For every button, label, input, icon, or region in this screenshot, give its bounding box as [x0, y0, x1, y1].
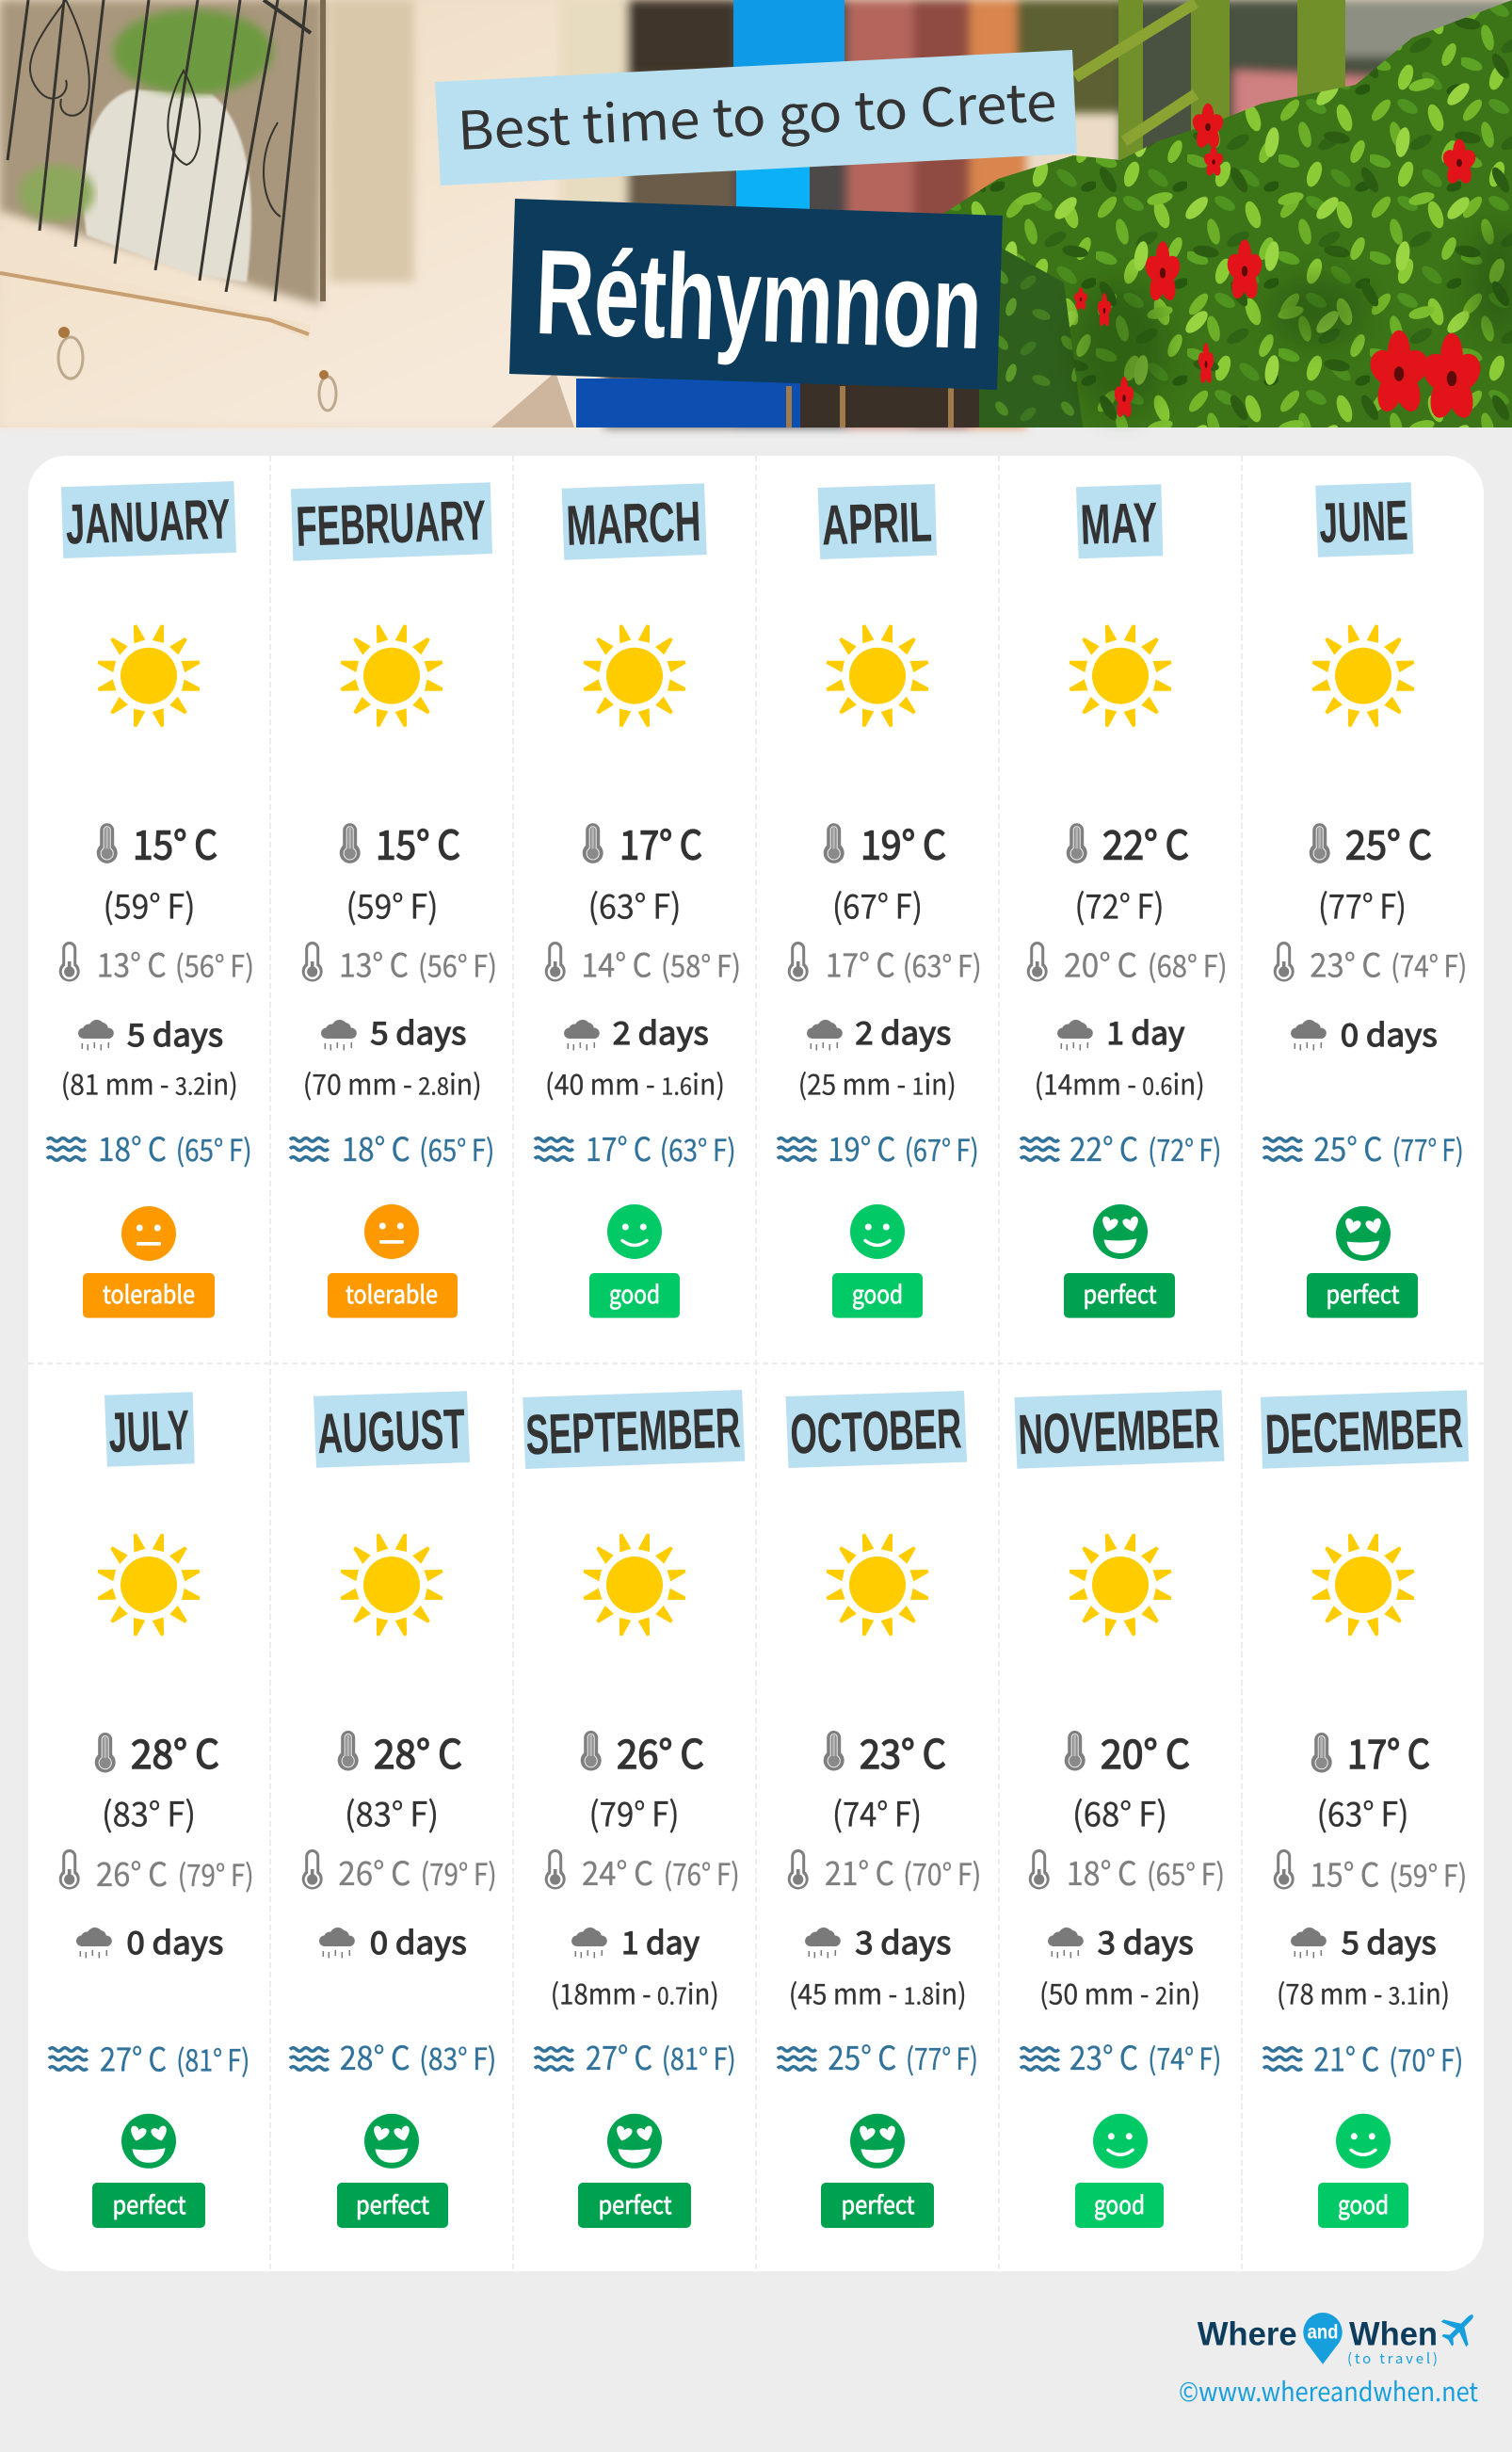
green door frames: [1118, 0, 1345, 198]
icon: sun: [826, 1533, 929, 1637]
rainy days: 5 days: [370, 1008, 466, 1054]
sea temperature: 28° C: [340, 2032, 410, 2080]
high temperature Fahrenheit: (83° F): [345, 1787, 439, 1836]
low temperature: [1027, 940, 1228, 987]
rainfall: (50 mm - 2in): [1039, 1972, 1200, 2013]
panel: November: [1014, 1390, 1225, 2228]
rating badge: good: good: [609, 1276, 660, 1311]
rating badge: tolerable: tolerable: [346, 1276, 438, 1311]
high temperature Fahrenheit: (67° F): [832, 879, 923, 928]
panel: September: [523, 1390, 745, 2228]
high temperature: [824, 1723, 946, 1781]
month title: September: SEPTEMBER: [524, 1396, 741, 1466]
rating badge: perfect: [1064, 1273, 1175, 1318]
low temperature: [1029, 1847, 1225, 1895]
icon: happy face: [1093, 2114, 1148, 2169]
low temperature: 18° C: [1067, 1847, 1137, 1895]
icon: sun: [1311, 1533, 1415, 1637]
high temperature: [824, 814, 946, 872]
low temperature: 17° C: [826, 940, 895, 987]
rainy days: 2 days: [855, 1008, 951, 1054]
low temperature: (56° F): [175, 944, 254, 987]
icon: love face: [1093, 1204, 1148, 1259]
low temperature: (56° F): [418, 944, 497, 987]
low temperature: (76° F): [664, 1851, 740, 1895]
month title: August: [314, 1391, 470, 1468]
rating badge: perfect: perfect: [1326, 1276, 1400, 1311]
low temperature: [545, 940, 741, 987]
rainfall: (40 mm - 1.6in): [545, 1062, 725, 1104]
sea temperature: 19° C: [828, 1123, 895, 1171]
rainy days: [319, 1918, 467, 1963]
green bush: [979, 188, 1111, 427]
low temperature: [1274, 1849, 1467, 1897]
high temperature Fahrenheit: (74° F): [832, 1787, 922, 1836]
panel: March: [535, 483, 741, 1318]
low temperature: [1274, 940, 1467, 987]
month title: July: [105, 1392, 195, 1467]
high temperature: 19° C: [861, 814, 946, 872]
month title: November: NOVEMBER: [1017, 1396, 1220, 1466]
month title: February: [291, 482, 492, 561]
rainy days: [805, 1918, 951, 1963]
icon: love face: [121, 2114, 176, 2169]
sea temperature: [778, 1123, 979, 1171]
high temperature: [1311, 1723, 1430, 1781]
low temperature: 21° C: [825, 1847, 894, 1895]
logo: Where and When: [1198, 2302, 1486, 2368]
high temperature: 23° C: [860, 1723, 946, 1781]
high temperature Fahrenheit: (79° F): [589, 1787, 680, 1836]
low temperature: (68° F): [1148, 944, 1228, 987]
rating badge: perfect: perfect: [356, 2186, 429, 2221]
sea temperature: (77° F): [1392, 1127, 1464, 1170]
rating badge: good: [1075, 2183, 1164, 2228]
rating badge: perfect: perfect: [113, 2186, 186, 2221]
rating badge: perfect: [821, 2183, 934, 2228]
low temperature: [545, 1847, 740, 1895]
high temperature: [583, 814, 702, 872]
sea temperature: 27° C: [586, 2032, 652, 2080]
sea temperature: [1021, 2032, 1221, 2080]
panel: December: [1261, 1390, 1469, 2228]
rainy days: 5 days: [127, 1010, 223, 1056]
window ledge: [0, 231, 311, 341]
icon: happy face: [1336, 2114, 1391, 2169]
month title: January: JANUARY: [65, 487, 232, 557]
rainfall: (18mm - 0.7in): [551, 1972, 719, 2013]
banner: Best time to go to Crete: Best time to go to Crete: [456, 60, 1058, 166]
month title: March: MARCH: [565, 490, 702, 557]
sea temperature: (70° F): [1389, 2037, 1463, 2080]
icon: sun: [97, 1533, 201, 1637]
rainy days: 3 days: [855, 1918, 951, 1963]
high temperature: 25° C: [1345, 814, 1432, 872]
sea temperature: (77° F): [906, 2036, 978, 2079]
high temperature: 26° C: [617, 1723, 704, 1781]
sea temperature: (67° F): [905, 1127, 979, 1170]
low temperature: (79° F): [178, 1852, 254, 1895]
low temperature: 13° C: [97, 940, 167, 987]
sea temperature: (65° F): [419, 1127, 494, 1170]
month title: October: [785, 1391, 967, 1468]
month title: February: FEBRUARY: [295, 489, 487, 558]
rainy days: [1057, 1008, 1184, 1054]
rainy days: 1 day: [621, 1918, 700, 1963]
low temperature: 14° C: [581, 940, 651, 987]
rainy days: [571, 1918, 700, 1963]
rating badge: good: good: [1094, 2186, 1145, 2221]
low temperature: 23° C: [1310, 940, 1381, 987]
rainy days: 0 days: [370, 1918, 467, 1963]
logo: Where and When: When: [1349, 2316, 1438, 2353]
sea temperature: [778, 2032, 978, 2080]
panel: August: [290, 1391, 497, 2228]
rainy days: 5 days: [1342, 1918, 1437, 1963]
rating badge: perfect: perfect: [1083, 1276, 1157, 1311]
banner: Réthymnon: Réthymnon: [534, 225, 984, 375]
blue bench and railings: [576, 379, 802, 427]
sea temperature: 27° C: [100, 2033, 167, 2081]
month title: May: [1076, 484, 1163, 558]
wall rings: [58, 337, 336, 411]
icon: sun: [1311, 624, 1415, 728]
low temperature: (65° F): [1147, 1851, 1225, 1895]
white card panel: [28, 456, 1484, 2271]
rainy days: 0 days: [126, 1918, 223, 1963]
sea temperature: 22° C: [1070, 1123, 1138, 1171]
low temperature: 26° C: [96, 1848, 168, 1896]
high temperature Fahrenheit: (59° F): [346, 879, 439, 928]
icon: love face: [1336, 1206, 1391, 1261]
rainfall: (81 mm - 3.2in): [61, 1062, 238, 1104]
high temperature: 15° C: [376, 814, 460, 872]
panel: April: [778, 484, 982, 1318]
month title: November: [1014, 1390, 1224, 1469]
icon: neutral face: [364, 1204, 419, 1259]
icon: airplane: [1435, 2302, 1486, 2353]
website credit: ©www.whereandwhen.net: [1179, 2372, 1478, 2410]
rating badge: tolerable: [83, 1273, 215, 1318]
rating badge: tolerable: [328, 1273, 458, 1318]
header photo: street in Réthymnon: [0, 0, 1512, 427]
month title: March: [562, 483, 707, 560]
sky strips: [733, 0, 844, 68]
high temperature: [95, 1723, 219, 1781]
sea temperature: (81° F): [176, 2037, 249, 2080]
low temperature: [788, 940, 982, 987]
sea temperature: [290, 2032, 496, 2080]
sea temperature: 21° C: [1313, 2033, 1379, 2081]
high temperature Fahrenheit: (83° F): [102, 1787, 196, 1836]
rainy days: [564, 1008, 709, 1054]
red flowers: [1073, 104, 1484, 426]
low temperature: [302, 940, 497, 987]
sea temperature: 23° C: [1070, 2032, 1138, 2080]
month title: June: JUNE: [1318, 489, 1408, 555]
high temperature: [340, 814, 460, 872]
rainy days: 3 days: [1098, 1918, 1194, 1963]
month title: October: OCTOBER: [789, 1396, 962, 1466]
high temperature: 28° C: [374, 1723, 462, 1781]
high temperature Fahrenheit: (63° F): [1316, 1787, 1408, 1836]
rainfall: (45 mm - 1.8in): [789, 1972, 967, 2013]
sea temperature: [1263, 2033, 1463, 2081]
panel: February: [290, 482, 497, 1318]
rainy days: [76, 1918, 223, 1963]
high temperature: 17° C: [619, 814, 702, 872]
rating badge: good: [1318, 2183, 1408, 2228]
rainy days: [78, 1010, 223, 1056]
rainy days: 2 days: [613, 1008, 709, 1054]
low temperature: (58° F): [661, 944, 741, 987]
banner: Réthymnon: [509, 199, 1003, 390]
sea temperature: [535, 2032, 736, 2080]
rating badge: perfect: perfect: [599, 2186, 672, 2221]
high temperature: [97, 814, 217, 872]
panel: October: [778, 1391, 981, 2228]
month title: April: [818, 484, 937, 559]
banner: Best time to go to Crete: [435, 50, 1077, 186]
rainy days: [1048, 1918, 1194, 1963]
rating badge: perfect: perfect: [842, 2186, 915, 2221]
icon: sun: [826, 624, 929, 728]
low temperature: (79° F): [421, 1851, 497, 1895]
rating badge: good: good: [852, 1276, 903, 1311]
rainy days: [807, 1008, 951, 1054]
rainy days: 0 days: [1341, 1010, 1438, 1056]
rainfall: (14mm - 0.6in): [1035, 1062, 1205, 1104]
sea temperature: 17° C: [586, 1123, 651, 1171]
icon: sun: [340, 1533, 443, 1637]
logo: Where and When: and: [1307, 2322, 1339, 2343]
icon: sun: [1069, 1533, 1172, 1637]
rating badge: tolerable: tolerable: [103, 1276, 195, 1311]
high temperature Fahrenheit: (59° F): [104, 879, 196, 928]
rainfall: (78 mm - 3.1in): [1277, 1972, 1450, 2013]
sea temperature: [49, 2033, 249, 2081]
rainy days: [1291, 1918, 1437, 1963]
month title: August: AUGUST: [316, 1397, 466, 1465]
icon: sun: [583, 624, 686, 728]
sea temperature: 25° C: [1313, 1123, 1382, 1171]
sea temperature: (74° F): [1148, 2036, 1221, 2079]
low temperature: [59, 1848, 254, 1896]
high temperature: 17° C: [1347, 1723, 1430, 1781]
sea temperature: 18° C: [98, 1123, 167, 1171]
icon: sun: [1069, 624, 1172, 728]
panel: July: [49, 1392, 254, 2228]
low temperature: 26° C: [338, 1847, 410, 1895]
sea temperature: [1021, 1123, 1221, 1171]
panel: January: [47, 481, 254, 1318]
sea temperature: (63° F): [660, 1127, 736, 1170]
month title: June: [1315, 482, 1413, 557]
low temperature: [59, 940, 254, 987]
rainfall: (70 mm - 2.8in): [303, 1062, 482, 1104]
icon: map pin: [1303, 2313, 1343, 2364]
low temperature: (74° F): [1391, 944, 1467, 987]
sea temperature: [1263, 1123, 1464, 1171]
rainy days: [321, 1008, 466, 1054]
high temperature: [338, 1723, 462, 1781]
month title: May: MAY: [1079, 491, 1159, 557]
icon: neutral face: [121, 1206, 176, 1261]
iron window bars: [8, 0, 311, 301]
doorway shadow: [491, 372, 574, 427]
month title: April: APRIL: [821, 490, 933, 557]
icon: love face: [850, 2114, 905, 2169]
high temperature: [1310, 814, 1432, 872]
sea temperature: [290, 1123, 494, 1171]
high temperature: 22° C: [1102, 814, 1189, 872]
high temperature Fahrenheit: (72° F): [1075, 879, 1164, 928]
icon: happy face: [607, 1204, 662, 1259]
low temperature: 20° C: [1064, 940, 1137, 987]
low temperature: (70° F): [903, 1851, 981, 1895]
sea temperature: (65° F): [176, 1127, 252, 1170]
high temperature Fahrenheit: (77° F): [1318, 879, 1407, 928]
sea temperature: (83° F): [419, 2036, 496, 2079]
logo: Where and When: (to travel): [1347, 2348, 1438, 2368]
month title: July: JULY: [107, 1398, 191, 1464]
rainfall: (25 mm - 1in): [798, 1062, 957, 1104]
low temperature: [788, 1847, 981, 1895]
rating badge: perfect: [578, 2183, 691, 2228]
high temperature: [1067, 814, 1189, 872]
icon: sun: [97, 624, 201, 728]
pot and plant behind the bars: [83, 89, 251, 282]
sea temperature: (72° F): [1148, 1127, 1221, 1170]
sea temperature: [47, 1123, 252, 1171]
rating badge: perfect: [337, 2183, 448, 2228]
high temperature: [581, 1723, 704, 1781]
rating badge: good: good: [1338, 2186, 1389, 2221]
high temperature: 20° C: [1101, 1723, 1190, 1781]
panel: June: [1263, 482, 1467, 1318]
icon: sun: [340, 624, 443, 728]
low temperature: 13° C: [339, 940, 409, 987]
month title: September: [523, 1390, 745, 1469]
low temperature: 24° C: [582, 1847, 653, 1895]
low temperature: (59° F): [1389, 1853, 1467, 1896]
icon: love face: [607, 2114, 662, 2169]
sea temperature: 25° C: [828, 2032, 896, 2080]
rainy days: [1291, 1010, 1438, 1056]
icon: love face: [364, 2114, 419, 2169]
icon: happy face: [850, 1204, 905, 1259]
rating badge: perfect: [92, 2183, 205, 2228]
low temperature: [302, 1847, 497, 1895]
sea temperature: [535, 1123, 736, 1171]
rating badge: good: [589, 1273, 680, 1318]
panel: May: [1021, 484, 1228, 1318]
rating badge: good: [832, 1273, 923, 1318]
rainy days: 1 day: [1106, 1008, 1184, 1054]
logo: Where and When: Where: [1198, 2316, 1297, 2353]
low temperature: 15° C: [1310, 1849, 1379, 1897]
high temperature Fahrenheit: (63° F): [587, 879, 682, 928]
month title: January: [61, 481, 236, 558]
high temperature: 28° C: [131, 1723, 219, 1781]
sea temperature: (81° F): [662, 2036, 736, 2079]
sea temperature: 18° C: [342, 1123, 410, 1171]
low temperature: (63° F): [903, 944, 982, 987]
high temperature: 15° C: [133, 814, 217, 872]
rating badge: perfect: [1307, 1273, 1418, 1318]
icon: sun: [583, 1533, 686, 1637]
high temperature Fahrenheit: (68° F): [1072, 1787, 1167, 1836]
